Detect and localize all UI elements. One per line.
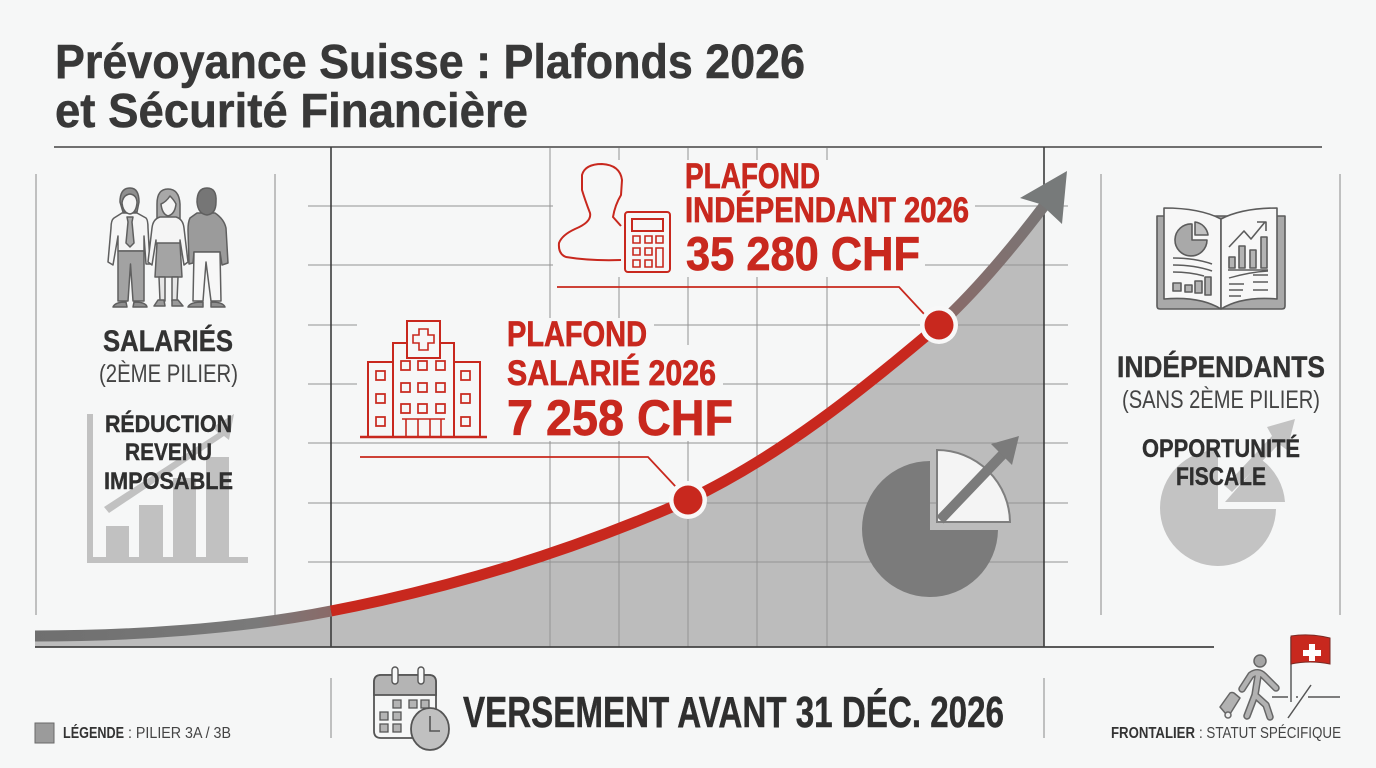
marker: indépendant point [920,306,958,344]
text: opportunité fiscale: FISCALE [1176,463,1266,491]
marker: salarié point [669,481,707,519]
chart area under the curve [35,212,1044,647]
icon: traveller crossing border with Swiss flag [1220,635,1340,718]
text: deadline: VERSEMENT AVANT 31 DÉC. 2026 [463,687,1004,737]
icon: three employees [108,188,228,307]
frontalier: FRONTALIER [1111,725,1195,742]
text: réduction revenu imposable: REVENU [125,439,212,466]
callout: plafond salarié [360,315,733,487]
icon: large pie with arrow [862,436,1019,597]
callout: plafond indépendant: INDÉPENDANT 2026 [685,190,969,230]
panel: salariés [87,188,248,563]
curve: grey arrow [939,171,1067,325]
title: et Sécurité Financière [55,85,528,138]
man with tie [108,213,150,265]
title: Prévoyance Suisse : Plafonds 2026 [55,36,805,89]
callout: plafond salarié: SALARIÉ 2026 [507,353,716,393]
bottom dividers [331,678,1044,738]
curve: grey start [35,611,331,636]
text: réduction revenu imposable: RÉDUCTION [105,410,232,438]
title [55,36,805,138]
text: opportunité fiscale: OPPORTUNITÉ [1142,434,1300,463]
icon: hospital building [360,321,487,437]
subheading: 2ème pilier: (2ÈME PILIER) [99,359,238,388]
text: réduction revenu imposable: IMPOSABLE [104,468,233,495]
man in dark sweater [188,213,228,265]
woman [157,189,180,226]
deadline [374,667,1004,750]
chart: growth curve with grid [35,147,1214,647]
icon: pale pie with arrow [1160,419,1295,566]
side panel rules [36,174,1340,615]
text: réduction revenu imposable [104,410,233,495]
leader line [360,457,676,487]
heading: indépendants: INDÉPENDANTS [1117,350,1325,384]
icon: calendar with clock [374,667,449,750]
callout: plafond indépendant [557,157,969,315]
frontalier [1111,635,1341,742]
leader line [557,287,925,315]
legend [35,723,231,743]
curve: red section [331,325,939,611]
callout: plafond indépendant: 35 280 CHF [686,227,920,280]
panel: indépendants [1117,208,1325,566]
icon: bar chart [87,414,248,563]
callout: plafond salarié: 7 258 CHF [507,390,733,446]
legend: LÉGENDE [63,723,124,742]
callout: plafond indépendant: PLAFOND [685,157,820,196]
icon: open report book [1157,208,1285,309]
heading: salariés: SALARIÉS [103,324,233,358]
subheading: sans 2ème pilier: (SANS 2ÈME PILIER) [1122,385,1320,414]
callout: plafond salarié: PLAFOND [507,315,647,354]
icon: person with calculator [559,164,670,272]
text: opportunité fiscale [1142,434,1300,491]
frontalier: : STATUT SPÉCIFIQUE [1199,723,1341,742]
legend: : PILIER 3A / 3B [128,725,231,742]
